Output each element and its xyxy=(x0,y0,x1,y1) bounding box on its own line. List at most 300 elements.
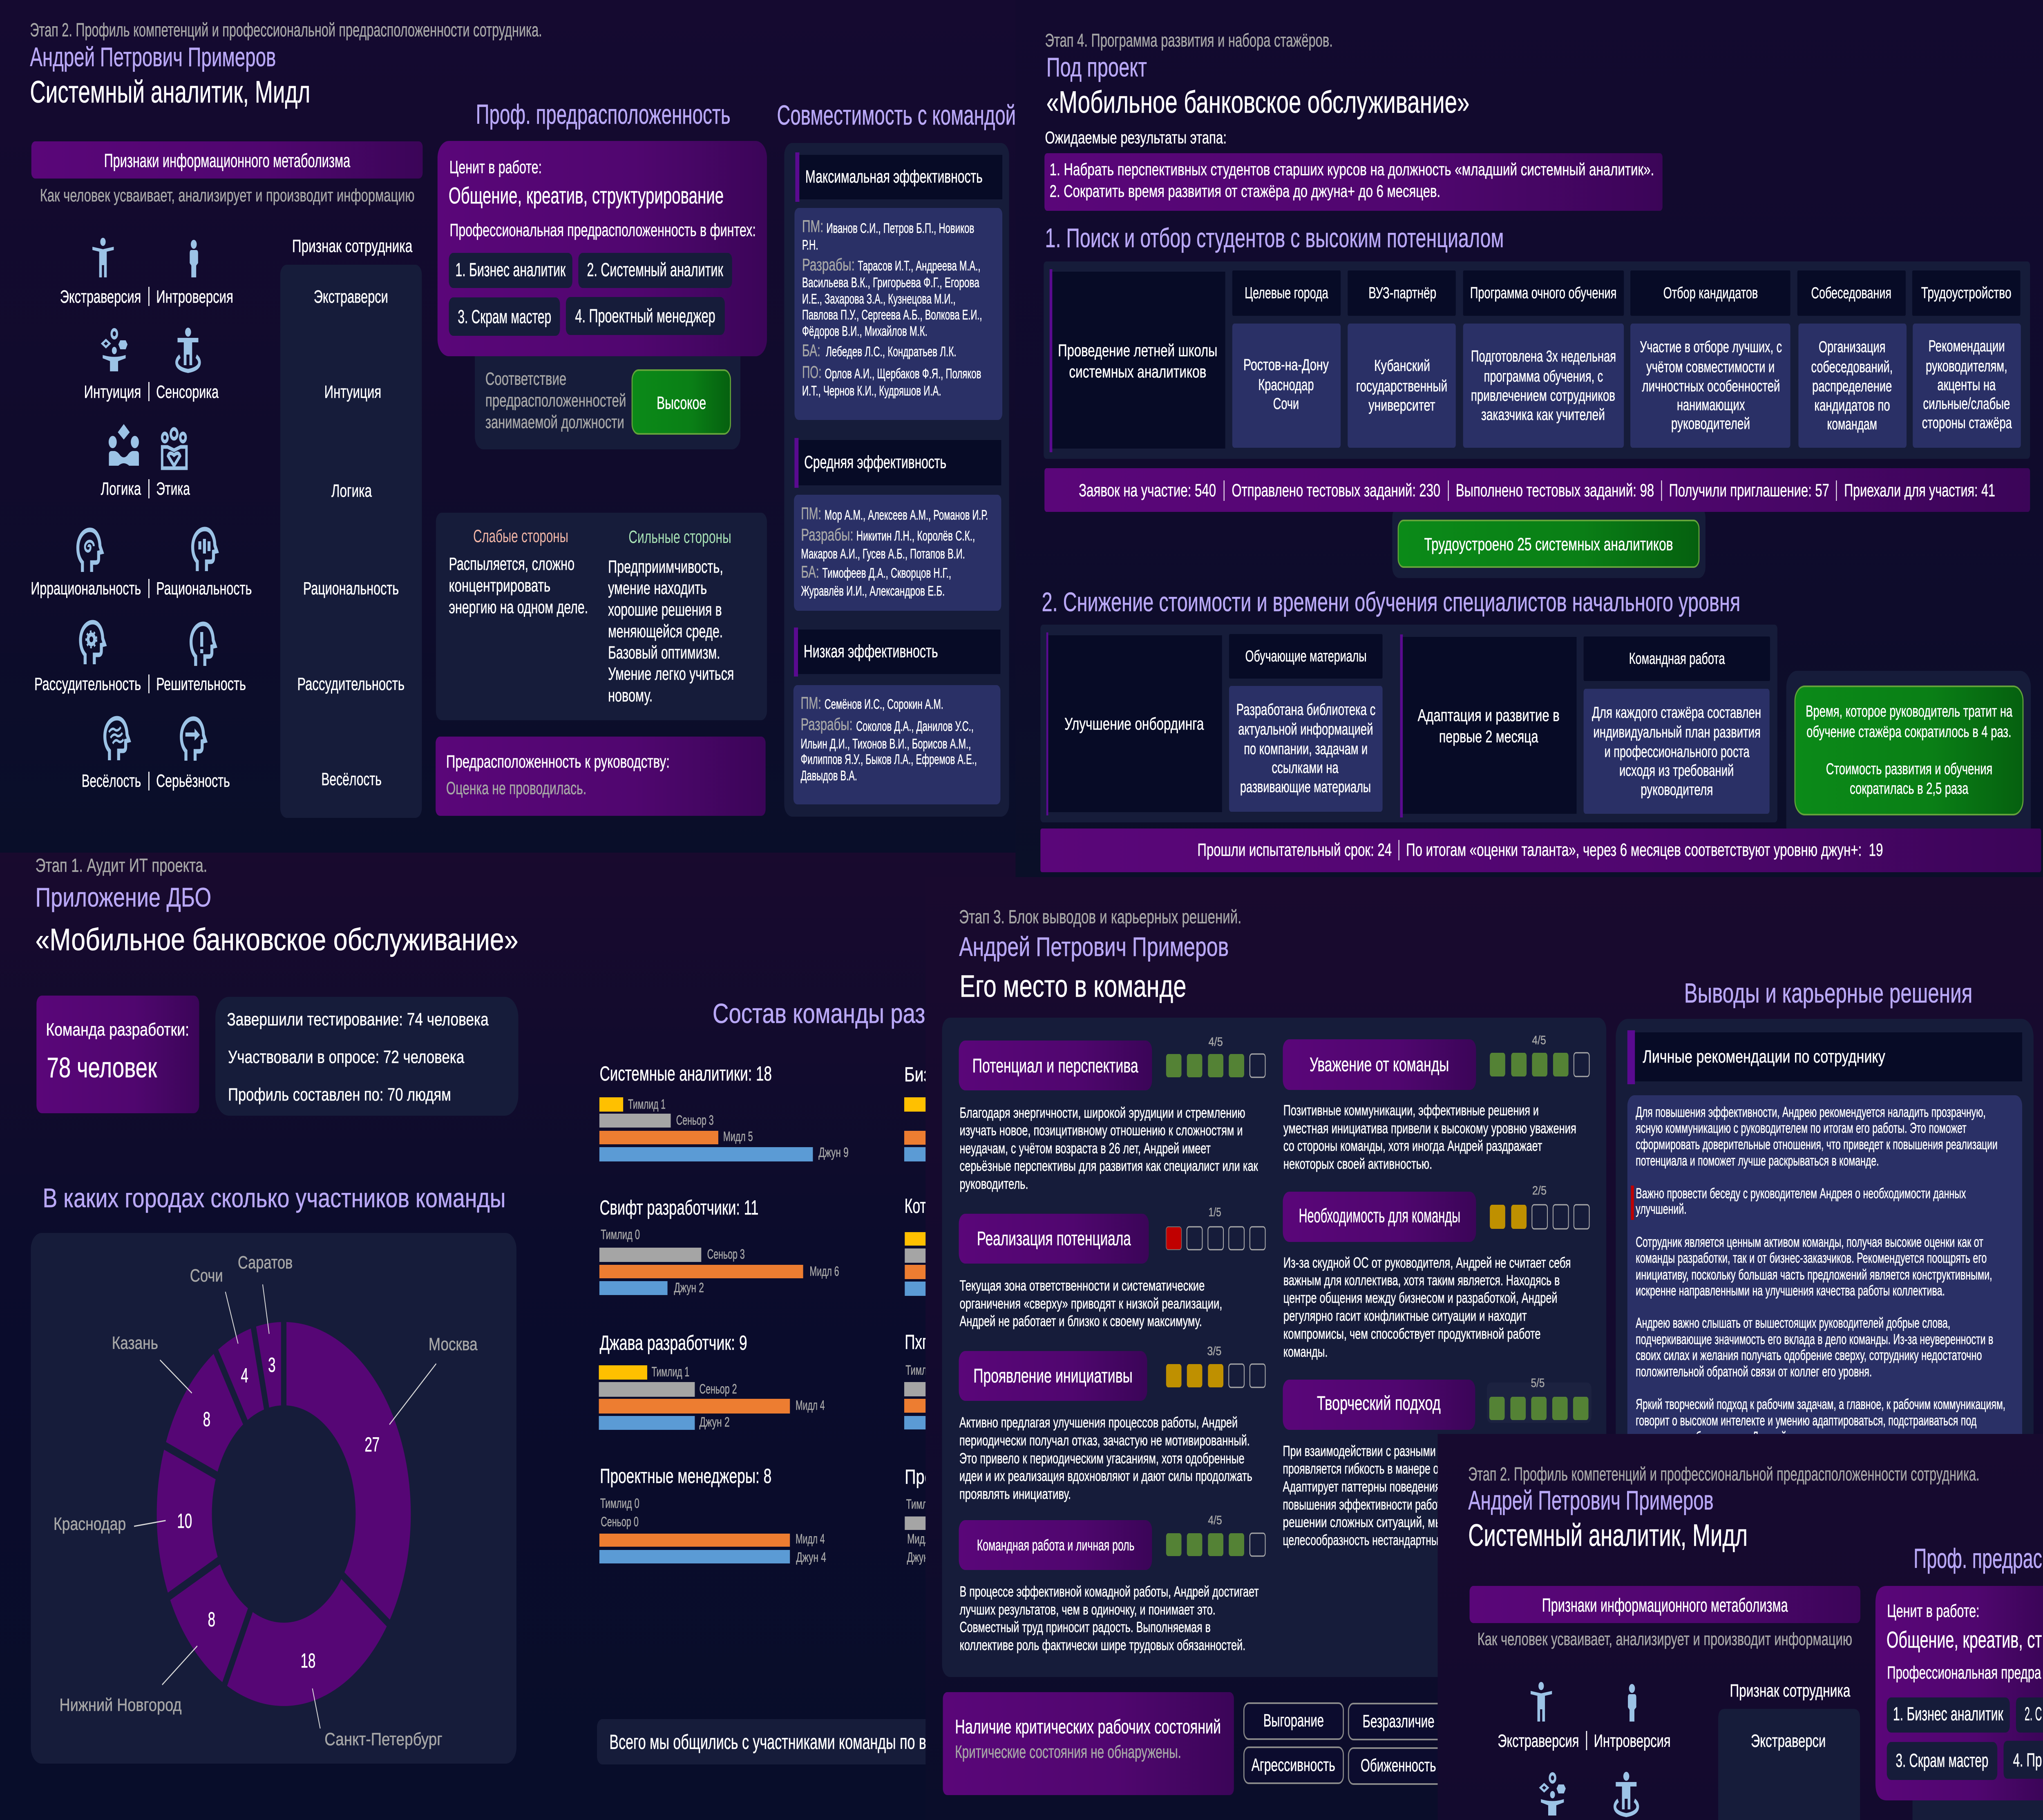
panel: employee traits: Логика xyxy=(331,480,372,500)
box: recommendations text: говорит о высоком интелекте и умению адаптироваться, подстраиваться под xyxy=(1636,1413,1976,1429)
team size card: Команда разработки: xyxy=(46,1019,189,1039)
result: employed analysts: Трудоустроено 25 системных аналитиков xyxy=(1424,534,1673,554)
column: employment: Рекомендации xyxy=(1929,337,2005,355)
chip: business analyst xyxy=(449,253,572,288)
chart: product owners: Джун 0 xyxy=(907,1550,936,1565)
chip: scrum master: 3. Скрам мастер xyxy=(1896,1751,1988,1771)
panel: employee traits: Экстраверси xyxy=(314,286,388,306)
city labels: Краснодар xyxy=(54,1514,126,1534)
box: low effectiveness names: Разрабы: xyxy=(801,715,853,734)
chip: scrum master: 3. Скрам мастер xyxy=(458,307,551,328)
column: employment: стороны стажёра xyxy=(1922,414,2012,432)
panel: employee traits: Рациональность xyxy=(303,578,399,598)
column: university partner: государственный xyxy=(1356,377,1447,395)
icon: introversion xyxy=(190,240,198,277)
box: maximum effectiveness names xyxy=(794,208,1002,420)
box: low effectiveness names: Соколов Д.А., Данилов У.С., xyxy=(856,719,974,734)
row heading: onboarding xyxy=(1046,632,1222,815)
column: employment: Трудоустройство xyxy=(1921,284,2012,302)
column: candidate selection: нанимающих xyxy=(1677,396,1745,414)
chart: php developers xyxy=(904,1331,1040,1429)
result: time and cost xyxy=(1786,671,2031,842)
box: recommendations text: ясную коммуникацию с руководителем по итогам его работы. Это поможет xyxy=(1636,1120,1967,1136)
box: maximum effectiveness names: БА: xyxy=(802,341,820,360)
column: candidate selection: руководителей xyxy=(1671,415,1750,433)
chart: java developers: Мидл 4 xyxy=(796,1398,825,1413)
column: learning materials xyxy=(1229,634,1383,812)
box: medium effectiveness names: БА: xyxy=(801,562,819,581)
icon: intuition xyxy=(101,330,127,371)
column: interviews: распределение xyxy=(1812,377,1892,395)
column: university partner: Кубанский xyxy=(1374,357,1430,375)
column: interviews: Собеседования xyxy=(1811,284,1891,302)
leader lines xyxy=(134,1284,436,1728)
chip: business analyst: 1. Бизнес аналитик xyxy=(455,260,566,281)
city labels: Санкт-Петербург xyxy=(324,1729,443,1749)
text: strengths: новому. xyxy=(608,685,653,705)
funnel stats bar xyxy=(1044,468,2030,512)
trait pairs with icons xyxy=(31,238,252,791)
chart: project managers: Джун 4 xyxy=(796,1550,826,1565)
card: team necessity: Необходимость для команды xyxy=(1299,1204,1460,1227)
panel: position fit xyxy=(1913,1787,2043,1820)
icon: extraversion xyxy=(1531,1682,1552,1722)
box: maximum effectiveness names: Тарасов И.Т., Андреева М.А., xyxy=(858,259,980,274)
card: potential: Потенциал и перспектива xyxy=(972,1054,1138,1077)
text: strengths: меняющейся среде. xyxy=(608,621,723,641)
segment values: 8 xyxy=(203,1408,210,1431)
chart: systems analysts: Мидл 5 xyxy=(723,1129,753,1144)
card: creative approach xyxy=(1283,1376,1591,1548)
row heading: summer school: Проведение летней школы xyxy=(1058,341,1217,360)
box: medium effectiveness names xyxy=(794,495,1001,611)
card: team respect: 4/5 xyxy=(1532,1034,1546,1047)
chart: php developers: Тимлид 0 xyxy=(905,1363,945,1378)
heading: student search: 1. Поиск и отбор студентов с высоким потенциалом xyxy=(1045,223,1504,253)
column: employment: сильные/слабые xyxy=(1923,395,2010,413)
panel: employee traits xyxy=(1718,1709,1860,1820)
employee name: Андрей Петрович Примеров xyxy=(1468,1485,1714,1515)
probation stats bar: Прошли испытательный срок: 24 xyxy=(1198,840,1392,860)
participation stats card xyxy=(215,997,519,1116)
text: weaknesses: энергию на одном деле. xyxy=(449,597,588,617)
metabolism header bar: Признаки информационного метаболизма xyxy=(104,151,350,172)
panel: leadership predisposition xyxy=(436,737,766,816)
text: weaknesses: концентрировать xyxy=(449,575,550,595)
result: time and cost: Стоимость развития и обучения xyxy=(1826,760,1992,778)
card: potential: 4/5 xyxy=(1209,1035,1223,1049)
card: potential: неудачам, с учётом возраста в 26 лет, Андрей имеет xyxy=(960,1140,1211,1157)
box: maximum effectiveness names: Павлова П.У., Сергеева А.Б., Волкова Е.И., xyxy=(802,308,982,323)
chip: project manager xyxy=(2003,1741,2043,1779)
column: teamwork: Командная работа xyxy=(1629,650,1725,668)
chart: swift developers: Свифт разработчики: 11 xyxy=(600,1196,758,1219)
funnel stats bar: Отправлено тестовых заданий: 230 xyxy=(1232,480,1440,500)
employee name: Андрей Петрович Примеров xyxy=(30,42,276,72)
card: team necessity: 2/5 xyxy=(1532,1184,1547,1197)
box: recommendations text: инициативу, поскольку большая часть предложений является конструктивными, xyxy=(1636,1267,1992,1283)
box: medium effectiveness names: Мор А.М., Алексеев А.М., Романов И.Р. xyxy=(825,508,988,523)
heading: team compatibility: Совместимость с командой xyxy=(777,100,1016,131)
card: realisation xyxy=(959,1206,1265,1329)
panel: critical states: Критические состояния не обнаружены. xyxy=(955,1742,1181,1762)
trait pair: irrationality / rationality xyxy=(31,578,252,598)
card: creative approach: проявляется гибкость в манере общения xyxy=(1283,1460,1475,1477)
chart: product owners: Продакт овнеры: 4 xyxy=(905,1465,1040,1488)
note: total interviews: Всего мы общились с участниками команды по всем проектам xyxy=(609,1731,1015,1753)
card: teamwork xyxy=(959,1514,1265,1653)
column: candidate selection: учётом совместимости и xyxy=(1646,358,1775,376)
card: realisation: Андрей не работает и близко к своему максимуму. xyxy=(960,1313,1202,1329)
segment values: 8 xyxy=(208,1608,215,1631)
text: weaknesses xyxy=(449,554,588,617)
box: maximum effectiveness names: Разрабы: xyxy=(802,255,855,274)
chip: systems analyst xyxy=(578,253,732,288)
column: teamwork xyxy=(1584,636,1770,814)
card: potential xyxy=(959,1035,1265,1192)
card: potential: изучать новое, позицитивному отношению к сложностям и xyxy=(960,1122,1243,1139)
employee traits heading: Признак сотрудника xyxy=(292,236,412,256)
column: learning materials: развивающие материалы xyxy=(1240,778,1371,796)
project label: Под проект xyxy=(1046,52,1147,82)
heading: cities: В каких городах сколько участников команды xyxy=(42,1183,505,1213)
metabolism header bar: Признаки информационного метаболизма xyxy=(1542,1595,1788,1616)
trait pair: logic / ethics: Этика xyxy=(156,478,190,498)
metabolism subtitle: Как человек усваивает, анализирует и производит информацию xyxy=(1477,1629,1852,1649)
chips: critical state types: Выгорание xyxy=(1263,1710,1324,1730)
trait pair: irrationality / rationality: Рациональность xyxy=(156,578,252,598)
column: teamwork: исходя из требований xyxy=(1619,762,1734,779)
trait pair: extraversion / introversion: Интроверсия xyxy=(156,286,233,306)
chips: critical state types: Обиженность xyxy=(1361,1755,1436,1775)
trait pair: logic / ethics xyxy=(101,478,190,498)
row heading: onboarding: Улучшение онбординга xyxy=(1064,714,1204,733)
chart: kotlin developers xyxy=(905,1195,1056,1296)
column: candidate selection: Участие в отборе лучших, с xyxy=(1640,338,1782,356)
column: in-person training: Подготовлена 3х недельная xyxy=(1471,348,1616,365)
team size card: 78 человек xyxy=(47,1051,157,1083)
icon: sensorics xyxy=(177,328,199,371)
header: recommendations: Личные рекомендации по сотруднику xyxy=(1643,1046,1885,1066)
card: team necessity: важным для коллектива, хотя таким является. Находясь в xyxy=(1283,1272,1560,1289)
trait pair: irrationality / rationality: Иррациональность xyxy=(31,578,141,598)
row heading: adaptation xyxy=(1400,634,1576,817)
slide: stage 1 IT audit xyxy=(0,853,1056,1820)
header: medium effectiveness xyxy=(794,438,1001,488)
column: in-person training: заказчика как учителей xyxy=(1481,406,1605,424)
panel: competency cards xyxy=(942,1018,1606,1677)
chip: systems analyst: 2. Системный аналитик xyxy=(587,260,724,281)
text: strengths: хорошие решения в xyxy=(608,599,722,619)
card: team respect: Уважение от команды xyxy=(1310,1053,1449,1076)
row heading: summer school: системных аналитиков xyxy=(1069,362,1206,381)
chart: swift developers: Джун 2 xyxy=(674,1280,704,1295)
card: realisation: Реализация потенциала xyxy=(977,1227,1131,1250)
heading: cost reduction: 2. Снижение стоимости и времени обучения специалистов начального уровня xyxy=(1042,587,1740,617)
column: candidate selection: личностных особенностей xyxy=(1642,377,1780,395)
section title: Его место в команде xyxy=(960,969,1186,1004)
trait pair: intuition / sensorics: Интуиция xyxy=(84,382,141,402)
column: interviews: собеседований, xyxy=(1811,358,1893,376)
stage caption: Этап 3. Блок выводов и карьерных решений. xyxy=(959,907,1241,928)
column: in-person training xyxy=(1463,270,1624,448)
header: maximum effectiveness: Максимальная эффективность xyxy=(805,166,983,186)
panel: values and professions: Ценит в работе: xyxy=(1887,1601,1980,1621)
header: recommendations xyxy=(1627,1030,2022,1084)
chip: scrum master xyxy=(449,297,560,336)
panel: employee traits: Интуиция xyxy=(324,382,381,402)
column: target cities: Целевые города xyxy=(1245,284,1328,302)
segment values xyxy=(177,1353,380,1672)
team size card xyxy=(36,996,199,1113)
participation stats card: Участвовали в опросе: 72 человека xyxy=(228,1047,464,1067)
metabolism subtitle: Как человек усваивает, анализирует и производит информацию xyxy=(40,185,415,205)
panel: strengths and weaknesses: Сильные стороны xyxy=(628,527,731,547)
segment values: 27 xyxy=(364,1433,380,1456)
panel: values and professions: Профессиональная предра xyxy=(1887,1662,2041,1682)
stage caption: Этап 1. Аудит ИТ проекта. xyxy=(36,855,207,876)
header: maximum effectiveness xyxy=(795,152,1002,202)
panel: leadership predisposition: Оценка не проводилась. xyxy=(446,778,586,798)
funnel stats bar: Выполнено тестовых заданий: 98 xyxy=(1456,480,1654,500)
trait pair: extraversion / introversion: Экстраверсия xyxy=(1498,1731,1579,1751)
chart: project managers xyxy=(599,1465,826,1565)
column: learning materials: по компании, задачам и xyxy=(1244,740,1368,758)
chart: business analysts xyxy=(904,1063,1055,1161)
chart: product owners: Тимлид 0 xyxy=(906,1497,945,1512)
chips: critical state types: Безразличие xyxy=(1363,1711,1435,1731)
box: recommendations text: сформировать доверительные отношения, что приведет к повышения реализации xyxy=(1636,1137,1998,1152)
box: recommendations text: искренне направленными на улучшения качества работы коллектива. xyxy=(1636,1283,1945,1299)
column: learning materials: Разработана библиотека с xyxy=(1236,701,1375,719)
chips: critical state types xyxy=(1244,1703,1448,1784)
probation stats bar: По итогам «оценки таланта», через 6 месяцев соответствуют уровню джун+: 19 xyxy=(1406,840,1883,860)
column: university partner: ВУЗ-партнёр xyxy=(1368,284,1436,302)
panel: employee traits: Экстраверси xyxy=(1751,1731,1826,1751)
card: initiative xyxy=(959,1344,1265,1502)
text: strengths: умение находить xyxy=(608,578,707,598)
panel: position fit: занимаемой должности xyxy=(485,412,624,432)
column: in-person training: программа обучения, с xyxy=(1484,368,1603,385)
trait pair: cheerfulness / seriousness: Серьёзность xyxy=(156,770,230,791)
participation stats card: Профиль составлен по: 70 людям xyxy=(228,1084,451,1104)
card: team necessity: компромисы, чем способствует продуктивной работе xyxy=(1283,1326,1541,1342)
city labels: Сочи xyxy=(190,1265,223,1285)
card: team respect: некоторых своей активностью. xyxy=(1283,1156,1432,1172)
chart: swift developers: Мидл 6 xyxy=(809,1264,839,1279)
box: recommendations text: Сотрудник является ценным активом команды, получая высокие оценки как от xyxy=(1636,1234,1983,1250)
heading: professional predisposition: Проф. предрас xyxy=(1913,1543,2042,1574)
column: interviews: командам xyxy=(1827,415,1877,433)
panel: values and professions xyxy=(438,141,767,356)
card: potential: серьёзные перспективы для развития как специалист или как xyxy=(960,1158,1258,1174)
chart: systems analysts xyxy=(599,1062,849,1161)
box: recommendations text: своих силах и желания получать одобрение сверху, сотруднику недостаточно xyxy=(1636,1347,1982,1363)
icon: extraversion xyxy=(92,238,114,277)
chart: project managers: Проектные менеджеры: 8 xyxy=(600,1465,771,1487)
panel: summer school table xyxy=(1044,261,2030,459)
heading: conclusions: Выводы и карьерные решения xyxy=(1684,978,1972,1009)
column: teamwork: Для каждого стажёра составлен xyxy=(1592,704,1761,721)
header: low effectiveness: Низкая эффективность xyxy=(804,641,938,661)
expected results box xyxy=(1044,153,1663,211)
box: low effectiveness names xyxy=(794,685,1000,804)
funnel stats bar: Получили приглашение: 57 xyxy=(1669,480,1829,500)
chart: donut of team members by city xyxy=(31,1233,516,1764)
trait pair: cheerfulness / seriousness xyxy=(82,770,230,791)
column: teamwork: и профессионального роста xyxy=(1605,743,1750,761)
stage caption: Этап 4. Программа развития и набора стажёров. xyxy=(1045,30,1333,51)
card: initiative: Проявление инициативы xyxy=(973,1364,1133,1387)
badge: high: Высокое xyxy=(657,393,706,413)
card: team necessity xyxy=(1283,1184,1589,1360)
chip: business analyst: 1. Бизнес аналитик xyxy=(1893,1704,2004,1725)
column: candidate selection xyxy=(1630,270,1790,448)
box: low effectiveness names: Филиппов Я.У., Быков Л.А., Ефремов А.Е., xyxy=(801,752,977,767)
chart: java developers: Джава разработчик: 9 xyxy=(600,1331,747,1354)
segment values: 3 xyxy=(268,1353,276,1376)
app label: Приложение ДБО xyxy=(36,882,211,912)
icon: rationality xyxy=(193,529,217,571)
chip: project manager: 4. Пр xyxy=(2013,1750,2042,1771)
card: team necessity: Из-за скудной ОС от руководителя, Андрей не считает себя xyxy=(1283,1255,1571,1271)
box: maximum effectiveness names: Р.Н. xyxy=(802,238,818,253)
chart: swift developers: Сеньор 3 xyxy=(707,1247,745,1262)
column: target cities: Краснодар xyxy=(1258,376,1314,394)
chips: critical state types: Агрессивность xyxy=(1252,1755,1335,1775)
panel: employee traits: Рассудительность xyxy=(297,674,405,694)
box: maximum effectiveness names: ПМ: xyxy=(802,217,823,236)
box: recommendations text: Яркий творческий подход к рабочим задачам, а главное, к рабочим коммуникациям, xyxy=(1636,1396,2005,1412)
panel: critical states xyxy=(943,1692,1234,1795)
text: strengths: Умение легко учиться xyxy=(608,663,734,683)
chart: systems analysts: Системные аналитики: 18 xyxy=(600,1062,772,1085)
box: recommendations text: потенциала и поможет лучше раскрываться в команде. xyxy=(1636,1153,1879,1169)
heading: team composition: Состав команды разработки xyxy=(713,998,1007,1029)
panel: onboarding table xyxy=(1040,625,1777,822)
icon: ethics xyxy=(162,429,186,468)
box: maximum effectiveness names: Васильева В.К., Григорьева Ф.Г., Егорова xyxy=(802,275,980,290)
slide: stage 3 conclusions xyxy=(925,877,2043,1820)
column: target cities xyxy=(1232,270,1341,448)
icon: intuition xyxy=(1539,1774,1566,1816)
icon: irrationality xyxy=(78,530,102,572)
card: creative approach: Адаптирует паттерны поведения для xyxy=(1283,1478,1461,1495)
trait pair: extraversion / introversion: Интроверсия xyxy=(1594,1731,1671,1751)
chart: swift developers: Тимлид 0 xyxy=(601,1227,640,1242)
box: medium effectiveness names: Макаров А.И., Гусев А.Б., Потапов В.И. xyxy=(801,547,965,562)
note: total interviews xyxy=(597,1719,1015,1764)
card: initiative: 3/5 xyxy=(1207,1344,1221,1358)
chart: project managers: Сеньор 0 xyxy=(601,1514,639,1529)
panel: employee traits xyxy=(280,265,422,818)
metabolism header bar xyxy=(1470,1586,1860,1623)
card: teamwork: коллективе роль фактически шире трудовых обязанностей. xyxy=(960,1637,1245,1653)
heading: professional predisposition: Проф. предрасположенность xyxy=(476,99,731,130)
panel: position fit: предрасположенностей xyxy=(485,390,626,410)
card: team respect xyxy=(1283,1034,1589,1172)
text: strengths xyxy=(608,556,734,705)
box: maximum effectiveness names: Орлов А.И., Щербаков Ф.Я., Поляков xyxy=(825,366,981,382)
column: employment: акценты на xyxy=(1937,376,1996,394)
panel: values and professions: Ценит в работе: xyxy=(449,157,542,177)
employee role: Системный аналитик, Мидл xyxy=(1468,1518,1748,1553)
card: initiative: Это привело к периодическим угасаниям, хотя одобренные xyxy=(959,1450,1245,1467)
box: medium effectiveness names: ПМ: xyxy=(801,504,821,523)
icon: decisiveness xyxy=(191,624,215,666)
row heading: summer school xyxy=(1050,269,1225,452)
icon: seriousness xyxy=(181,719,206,761)
text: strengths: Предприимчивость, xyxy=(608,556,723,576)
card: teamwork: 4/5 xyxy=(1208,1514,1222,1527)
panel: employee traits: Весёлость xyxy=(321,769,382,789)
trait pair: extraversion / introversion xyxy=(1498,1731,1671,1751)
employee role: Системный аналитик, Мидл xyxy=(30,75,310,109)
card: initiative: проявлять инициативу. xyxy=(959,1486,1071,1502)
box: maximum effectiveness names: И.Е., Захарова З.А., Кузнецова М.И., xyxy=(802,292,956,307)
header: low effectiveness xyxy=(794,628,1000,677)
expected results box: 2. Сократить время развития от стажёра до джуна+ до 6 месяцев. xyxy=(1050,181,1440,201)
participation stats card: Завершили тестирование: 74 человека xyxy=(227,1009,489,1029)
trait pair: judgement / decisiveness: Решительность xyxy=(156,674,246,694)
chart: swift developers xyxy=(599,1196,839,1295)
box: maximum effectiveness names: И.Т., Чернов К.И., Кудряшов И.А. xyxy=(802,384,941,399)
slide: stage 2 repeated overlay xyxy=(1438,1434,2043,1820)
card: initiative: идеи и их реализация вдохновляют и дают силы продолжать xyxy=(959,1468,1252,1484)
box: medium effectiveness names: Журавлёв И.И., Александров Е.Б. xyxy=(801,584,945,599)
segment values: 4 xyxy=(241,1364,248,1387)
chip: project manager xyxy=(566,297,725,335)
box: recommendations text xyxy=(1627,1095,2022,1463)
stage caption: Этап 2. Профиль компетенций и профессиональной предрасположенности сотрудника. xyxy=(30,20,542,41)
result: time and cost: сократилась в 2,5 раза xyxy=(1850,780,1969,797)
trait pair: judgement / decisiveness: Рассудительность xyxy=(34,674,141,694)
result: time and cost: обучение стажёра сократилось в 4 раз. xyxy=(1806,723,2012,741)
box: recommendations text: улучшений. xyxy=(1636,1201,1687,1217)
chip: scrum master xyxy=(1887,1742,1997,1780)
icon: cheerfulness xyxy=(105,718,129,760)
chart: systems analysts: Джун 9 xyxy=(818,1145,849,1160)
slide: stage 2 competence profile xyxy=(0,0,1016,853)
project title: «Мобильное банковское обслуживание» xyxy=(36,922,519,957)
chart: systems analysts: Тимлид 1 xyxy=(628,1097,666,1112)
panel: values and professions xyxy=(1875,1586,2043,1800)
city labels: Москва xyxy=(429,1334,478,1354)
card: teamwork: Совместный труд приносит радость. Выполняемая в xyxy=(960,1619,1211,1635)
panel: values and professions: Общение, креатив, ст xyxy=(1887,1627,2042,1653)
card: creative approach: решении сложных ситуаций, мыслит xyxy=(1283,1514,1465,1530)
card: team respect: со стороны команды, хотя иногда Андрей раздражает xyxy=(1283,1138,1542,1154)
employee name: Андрей Петрович Примеров xyxy=(959,931,1229,962)
panel: values and professions: Общение, креатив, структурирование xyxy=(449,183,724,209)
chart: business analysts: Бизнес аналитики: 7 xyxy=(904,1063,1055,1086)
column: university partner: университет xyxy=(1368,397,1435,414)
box: maximum effectiveness names: Фёдоров В.И., Михайлов М.К. xyxy=(802,324,928,339)
card: team necessity: центре общения между бизнесом и разработкой, Андрей xyxy=(1283,1290,1558,1306)
trait pair: logic / ethics: Логика xyxy=(101,478,141,498)
result: time and cost: Время, которое руководитель тратит на xyxy=(1806,703,2013,720)
trait pair: cheerfulness / seriousness: Весёлость xyxy=(82,770,141,791)
column: university partner xyxy=(1348,270,1456,448)
box: low effectiveness names: Семёнов И.С., Сорокин А.М. xyxy=(825,697,943,712)
card: initiative: периодически получал отказ, зачастую не мотивированный. xyxy=(959,1432,1250,1449)
card: teamwork: В процессе эффективной комадной работы, Андрей достигает xyxy=(960,1583,1259,1600)
panel: strengths and weaknesses: Слабые стороны xyxy=(473,526,568,546)
card: realisation: органичения «сверху» приводят к низкой реализации, xyxy=(960,1295,1222,1312)
box: recommendations text: Важно провести беседу с руководителем Андрея о необходимости данных xyxy=(1636,1186,1966,1201)
column: in-person training: Программа очного обучения xyxy=(1470,284,1616,302)
chart: product owners xyxy=(905,1465,1040,1565)
